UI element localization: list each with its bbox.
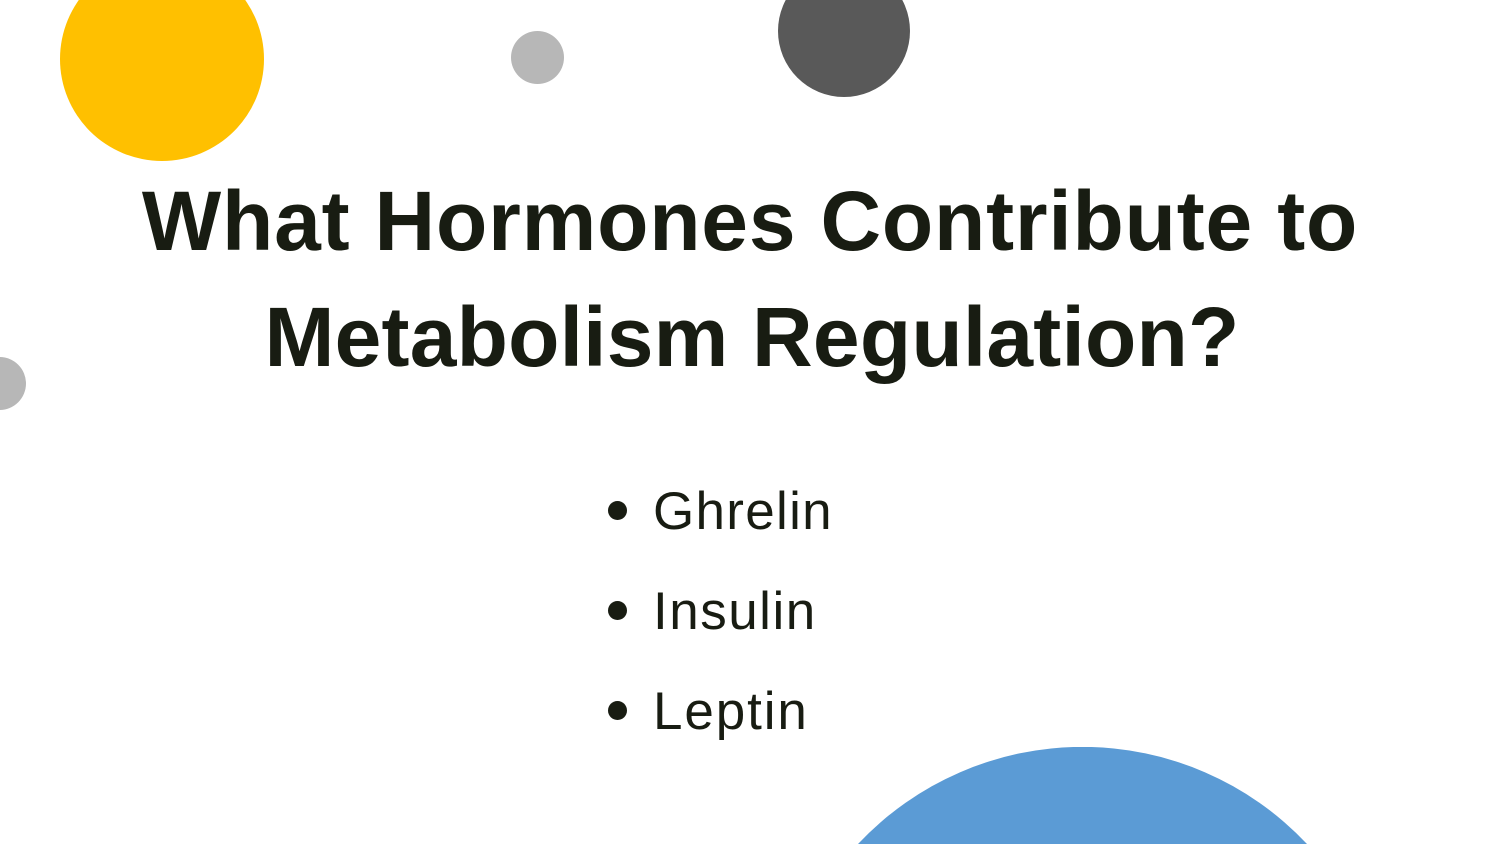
title: Metabolism Regulation? <box>264 290 1240 384</box>
list item: Leptin: Leptin <box>653 682 809 741</box>
decorative circle: yellow <box>60 0 264 161</box>
hormone list <box>608 482 833 741</box>
decorative circle: small grey left <box>0 357 26 410</box>
decorative circle: blue, cropped by bottom edge <box>858 747 1307 844</box>
title: What Hormones Contribute to <box>142 174 1358 268</box>
list item: Ghrelin: Ghrelin <box>653 482 833 541</box>
decorative circle: small grey top <box>511 31 564 84</box>
list item: Insulin: Insulin <box>653 582 817 641</box>
title <box>142 174 1358 384</box>
decorative circle: dark grey <box>778 0 910 97</box>
